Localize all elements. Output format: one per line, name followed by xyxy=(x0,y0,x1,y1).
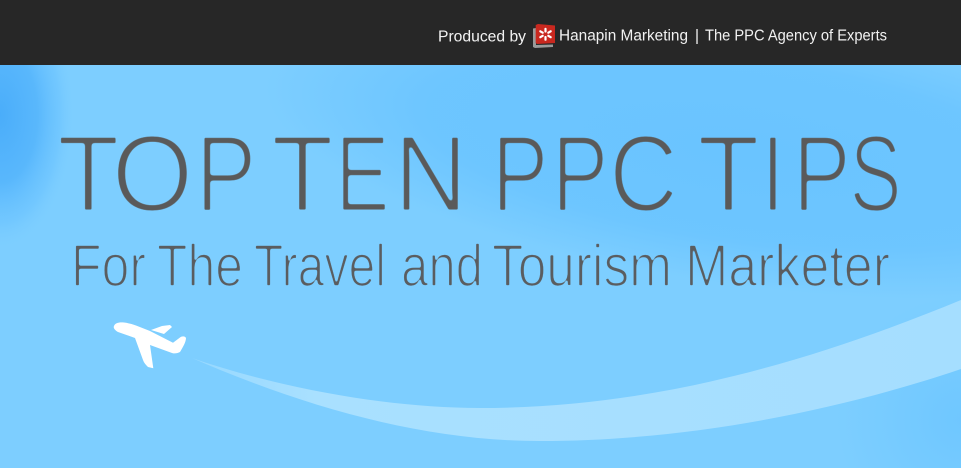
produced by text: Produced by xyxy=(438,28,526,46)
title: P xyxy=(793,113,851,235)
title: P xyxy=(492,113,549,235)
subtitle: Marketer xyxy=(685,233,890,299)
subtitle: For xyxy=(71,233,146,299)
company and tagline text: Hanapin Marketing xyxy=(559,28,688,45)
company and tagline text: The PPC Agency of Experts xyxy=(705,28,887,45)
title: O xyxy=(112,113,193,235)
icon: Hanapin logo xyxy=(533,24,555,48)
subtitle: Travel xyxy=(254,233,386,299)
icon: airplane xyxy=(114,322,186,368)
title: I xyxy=(761,113,785,235)
contrail swoosh xyxy=(192,300,961,441)
subtitle: The xyxy=(157,233,243,299)
subtitle xyxy=(71,233,890,299)
top bar xyxy=(0,0,961,65)
subtitle: Tourism xyxy=(492,233,672,299)
title: C xyxy=(609,113,678,235)
title: S xyxy=(849,113,902,235)
title: N xyxy=(394,113,468,235)
company and tagline text: | xyxy=(695,28,699,45)
producer credit xyxy=(438,24,887,48)
title: P xyxy=(552,113,609,235)
title xyxy=(57,113,902,235)
title: T xyxy=(272,113,333,235)
subtitle: and xyxy=(401,233,483,299)
title: P xyxy=(196,113,255,235)
title: T xyxy=(57,113,119,235)
title: T xyxy=(698,113,759,235)
title: E xyxy=(335,113,390,235)
